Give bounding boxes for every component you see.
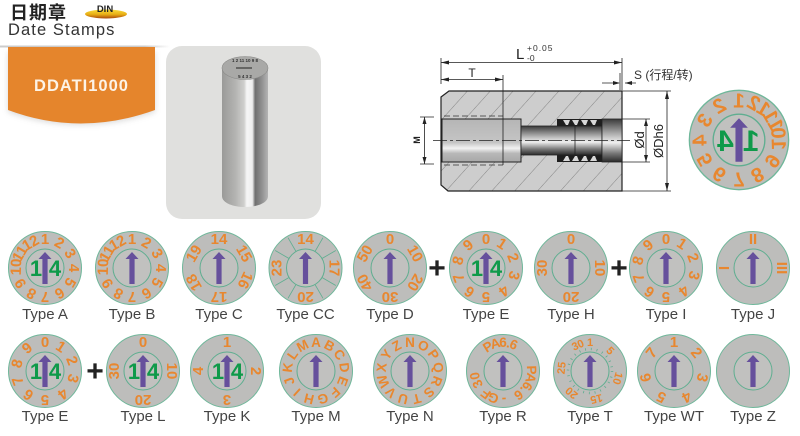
- stamp: Type E (second row): 5: [41, 391, 49, 408]
- stamp: Type H: 0: [567, 231, 575, 248]
- stamp: Type L: 20: [135, 391, 151, 408]
- stamp: Type D: 20: [403, 271, 426, 294]
- stamp: Type C: 18: [183, 271, 206, 294]
- stamp: Type A: 6: [51, 283, 67, 302]
- stamp: Type B: 2: [138, 234, 154, 253]
- stamp: Type A: 5: [60, 274, 79, 290]
- stamp: Type WT: 5: [654, 387, 669, 406]
- stamp: Type M: G: [316, 390, 330, 407]
- stamp: Type B: 5: [147, 274, 166, 290]
- icon: DIN gold badge: [85, 4, 127, 18]
- stamp: Type CC: 23: [268, 260, 286, 276]
- stamp: Type A: 4: [49, 256, 62, 281]
- dimension L: [441, 43, 622, 165]
- stamp: Type A: [8, 231, 82, 323]
- stamp: Type M: M: [294, 337, 311, 355]
- stamp: Type T: 15: [589, 391, 604, 406]
- stamp: Type E (second row): 9: [19, 339, 36, 358]
- stamp: Type M: L: [284, 347, 301, 362]
- plus sign: +: [428, 252, 446, 285]
- stamp: Type D: 30: [382, 288, 398, 305]
- stamp: Type B: 7: [128, 288, 136, 305]
- stamp: Type K: 2: [247, 367, 264, 375]
- stamp: Type N: W: [374, 372, 393, 390]
- stamp: Type K: 4: [190, 366, 207, 375]
- stamp: Type B: 9: [98, 275, 117, 291]
- stamp: Type M: C: [330, 346, 348, 363]
- stamp: Type Z: Type Z: [730, 408, 776, 425]
- dimension S: [602, 67, 693, 90]
- stamp: Type I: Type I: [646, 306, 686, 323]
- stamp: Type I: 2: [683, 251, 702, 265]
- stamp: Type I: 1: [673, 235, 690, 253]
- stamp: Type CC: [268, 231, 342, 323]
- stamp: Type N: T: [410, 390, 423, 407]
- spring cavity: [557, 119, 602, 162]
- stamp: Type E: 7: [450, 271, 469, 285]
- stamp: Type B: 4: [152, 264, 169, 273]
- stamp: Type E: 8: [449, 254, 468, 267]
- stamp: Type E: 3: [504, 269, 523, 282]
- large mirrored stamp face: 7: [733, 168, 745, 190]
- stamp: Type L: 0: [139, 334, 147, 351]
- stamp: Type WT: 7: [643, 344, 661, 362]
- pin head: [602, 119, 622, 162]
- large mirrored stamp face: 6: [709, 161, 730, 186]
- stamp: Type D: 40: [354, 271, 377, 294]
- stamp: Type D: 0: [386, 231, 394, 248]
- stamp: Type E (second row): 0: [41, 334, 49, 351]
- stamp: Type L: 4: [147, 359, 160, 384]
- ejector pin: [521, 126, 602, 155]
- stamp: Type E (second row): 1: [52, 338, 69, 356]
- stamp: Type M: H: [303, 390, 316, 407]
- panel: product photo of stamp pin: [166, 46, 321, 219]
- stamp: Type WT: 4: [678, 387, 694, 406]
- stamp: Type E (second row): 2: [62, 354, 81, 368]
- stamp: Type C: 14: [211, 231, 228, 248]
- stamp: Type R: P: [480, 338, 496, 356]
- stamp: Type A: 7: [41, 288, 49, 305]
- dimension ØDh6: ØDh6: [651, 124, 666, 158]
- stamp: Type N: S: [421, 384, 437, 401]
- icon: DIN gold badge: DIN: [97, 4, 113, 15]
- stamp: Type I: [629, 231, 703, 323]
- stamp: Type E: 6: [461, 282, 478, 301]
- stamp: Type M: K: [280, 362, 296, 373]
- stamp: Type C: 16: [234, 269, 256, 291]
- stamp: Type N: P: [425, 347, 442, 363]
- stamp: Type E (second row): Type E: [22, 408, 68, 425]
- stamp: Type CC: 20: [297, 288, 314, 305]
- stamp: Type N: Q: [430, 361, 446, 374]
- product tag: DDATI1000: [8, 47, 155, 125]
- large mirrored stamp face: [689, 90, 789, 190]
- stamp: Type N: Type N: [386, 408, 434, 425]
- stamp: Type E: 4: [495, 281, 512, 300]
- stamp: Type CC: 14: [297, 231, 314, 248]
- stamp: Type C: Type C: [195, 306, 243, 323]
- plus sign: +: [610, 252, 628, 285]
- stamp: Type D: 10: [403, 242, 426, 265]
- stamp: Type I: 3: [684, 269, 703, 282]
- large mirrored stamp face: 10: [766, 127, 789, 150]
- dimension Ød: [622, 119, 650, 162]
- stamp: Type M: Type M: [291, 408, 341, 425]
- stamp: Type T: 10: [610, 371, 624, 386]
- stamp: Type R: 3: [469, 377, 486, 391]
- body section with hatching: [441, 91, 622, 191]
- stamp: Type K: 3: [223, 391, 231, 408]
- stamp: Type A: Type A: [22, 306, 68, 323]
- stamp: Type N: [374, 334, 446, 425]
- stamp: Type E (second row): [8, 334, 82, 425]
- stamp: Type A: 4: [65, 264, 82, 273]
- stamp: Type R: F: [478, 385, 494, 402]
- stamp: Type E (second row): 1: [30, 359, 42, 384]
- stamp: Type R: [466, 334, 540, 425]
- stamp: Type A: 1: [30, 256, 42, 281]
- stamp: Type I: 4: [675, 281, 692, 300]
- stamp: Type H: Type H: [547, 306, 595, 323]
- title: Chinese heading: 日期章: [10, 2, 67, 23]
- stamp: Type L: Type L: [120, 408, 166, 425]
- stamp: Type T: 1: [587, 337, 593, 349]
- stamp: Type H: 30: [534, 260, 551, 276]
- stamp: Type K: [190, 334, 264, 425]
- stamp: Type J: [716, 231, 790, 323]
- stamp: Type E (second row): 4: [49, 359, 62, 384]
- stamp: Type C: [182, 231, 256, 323]
- product tag: DDATI1000: DDATI1000: [34, 77, 129, 95]
- stamp: Type B: [95, 231, 169, 323]
- stamp: Type H: 10: [591, 260, 608, 276]
- stamp: Type T: [554, 334, 626, 425]
- stamp: Type E (second row): 6: [20, 385, 37, 404]
- stamp: Type K: 1: [212, 359, 224, 384]
- large mirrored stamp face: 5: [693, 149, 718, 170]
- stamp: Type H: 20: [563, 288, 579, 305]
- stamp: Type R: -: [501, 392, 507, 407]
- stamp: Type R: 6: [499, 335, 507, 350]
- stamp: Type N: O: [415, 337, 432, 355]
- panel: product photo of stamp pin: 5 4 3 2: [238, 74, 252, 79]
- large mirrored stamp face: 3: [693, 110, 718, 131]
- stamp: Type M: I: [291, 385, 303, 399]
- stamp: Type R: P: [524, 365, 539, 375]
- stamp: Type E (second row): 3: [63, 372, 82, 385]
- stamp: Type N: R: [428, 374, 445, 389]
- stamp: Type L: 1: [128, 359, 140, 384]
- stamp: Type E: 9: [460, 236, 477, 255]
- stamp: Type M: [280, 334, 352, 425]
- stamp: Type D: Type D: [366, 306, 414, 323]
- stamp: Type N: Y: [378, 347, 395, 363]
- stamp: Type B: 6: [138, 283, 154, 302]
- stamp: Type A: 10: [8, 258, 25, 276]
- stamp: Type B: 10: [95, 258, 112, 276]
- stamp: Type WT: [637, 334, 711, 425]
- stamp: Type I: 7: [630, 271, 649, 285]
- stamp: Type I: 9: [640, 236, 657, 255]
- stamp: Type R: 6: [519, 379, 536, 394]
- large mirrored stamp face: 1: [733, 90, 745, 112]
- stamp: Type A: 11: [9, 243, 32, 265]
- stamp: Type A: 12: [19, 232, 42, 255]
- stamp: Type M: A: [311, 335, 321, 350]
- stamp: Type K: Type K: [204, 408, 250, 425]
- stamp: Type A: 2: [51, 234, 67, 253]
- stamp: Type M: E: [334, 374, 351, 388]
- stamp: Type J: Type J: [731, 306, 775, 323]
- stamp: Type E: 1: [471, 256, 483, 281]
- stamp: Type T: 20: [563, 384, 581, 401]
- stamp: Type E: 0: [482, 231, 490, 248]
- stamp: Type A: 1: [41, 231, 49, 248]
- stamp: Type WT: Type WT: [644, 408, 704, 425]
- plus sign: +: [86, 355, 104, 388]
- stamp: Type WT: 3: [693, 371, 711, 383]
- stamp: Type E: 1: [493, 235, 510, 253]
- dimension Ød: Ød: [632, 131, 647, 149]
- stamp: Type T: 5: [603, 345, 616, 358]
- dimension L: +0.05: [527, 43, 554, 53]
- dimension M: M: [412, 136, 422, 144]
- stamp: Type WT: 2: [687, 344, 705, 362]
- stamp: Type I: 0: [662, 231, 670, 248]
- stamp: Type CC: Type CC: [276, 306, 335, 323]
- stamp: Type R: 6: [511, 387, 526, 404]
- dimension M: [412, 117, 434, 164]
- stamp: Type A: 3: [60, 246, 79, 262]
- stamp: Type M: J: [281, 375, 298, 387]
- stamp: Type B: 8: [111, 284, 126, 303]
- stamp: Type K: 1: [223, 334, 231, 351]
- stamp: Type D: 50: [354, 242, 377, 265]
- dimension L: L: [516, 46, 524, 63]
- large mirrored stamp face: 9: [759, 150, 784, 171]
- stamp: Type T: 25: [556, 361, 569, 375]
- centre line: [433, 140, 630, 142]
- stamp: Type E: 4: [490, 256, 503, 281]
- stamp: Type B: 11: [96, 243, 119, 265]
- stamp: Type A: 9: [11, 275, 30, 291]
- stamp: Type E: [449, 231, 523, 323]
- dimension S: S (行程/转): [634, 67, 693, 82]
- stamp: Type I: 5: [662, 288, 670, 305]
- header rule: [0, 46, 170, 48]
- stamp: Type R: 0: [467, 371, 483, 381]
- large mirrored stamp face: 4: [689, 134, 711, 146]
- dimension L: -0: [527, 53, 535, 63]
- stamp: Type E (second row): 7: [9, 374, 28, 388]
- stamp: Type L: 10: [163, 363, 180, 379]
- stamp: Type C: 15: [232, 242, 255, 265]
- large mirrored stamp face: 12: [743, 91, 774, 122]
- stamp: Type T: Type T: [567, 408, 613, 425]
- stamp: Type R: .: [505, 335, 512, 351]
- stamp: Type N: X: [374, 362, 390, 373]
- dimension ØDh6: [622, 91, 671, 191]
- stamp: Type N: U: [397, 390, 410, 407]
- stamp: Type E: 5: [482, 288, 490, 305]
- stamp: Type E (second row): 8: [8, 357, 27, 370]
- stamp: Type L: 30: [106, 363, 123, 379]
- stamp: Type R: 6: [507, 336, 520, 353]
- subtitle: Date Stamps: Date Stamps: [8, 21, 115, 39]
- stamp: Type I: 6: [641, 282, 658, 301]
- stamp: Type B: Type B: [109, 306, 155, 323]
- stamp: Type L: [106, 334, 180, 425]
- stamp: Type R: Type R: [479, 408, 527, 425]
- stamp: Type B: 1: [128, 231, 136, 248]
- stamp: Type Z: [716, 334, 790, 425]
- stamp: Type WT: 1: [670, 334, 678, 351]
- panel: product photo of stamp pin: 1 2 11 10 9 8: [232, 58, 259, 63]
- stamp: Type B: 12: [106, 232, 129, 255]
- stamp: Type CC: 17: [326, 260, 342, 276]
- stamp: Type E (second row): 4: [54, 384, 71, 403]
- stamp: Type R: G: [486, 389, 501, 407]
- stamp: Type I: 8: [629, 254, 648, 267]
- stamp: Type J: I: [716, 266, 733, 270]
- stamp: Type M: F: [327, 384, 343, 401]
- large mirrored stamp face: 8: [747, 162, 767, 186]
- stamp: Type J: III: [773, 262, 790, 274]
- stamp: Type B: 3: [147, 246, 166, 262]
- technical diagram: cross-section: [412, 43, 693, 191]
- stamp: Type E: 2: [503, 251, 522, 265]
- stamp: Type T: 30: [570, 338, 586, 354]
- threaded bore: [442, 119, 521, 162]
- stamp: Type C: 17: [211, 288, 227, 305]
- large mirrored stamp face: 11: [758, 106, 787, 136]
- stamp: Type C: 19: [183, 242, 206, 265]
- stamp: Type H: [534, 231, 608, 323]
- large mirrored stamp face: 1: [743, 125, 760, 158]
- stamp: Type WT: 6: [637, 371, 655, 383]
- stamp: Type A: 8: [24, 284, 39, 303]
- large mirrored stamp face: 4: [717, 125, 734, 158]
- stamp: Type N: Z: [389, 337, 404, 354]
- dimension T: [441, 66, 503, 82]
- stamp: Type D: [354, 231, 426, 323]
- stamp: Type N: V: [383, 384, 399, 401]
- dimension T: T: [468, 66, 476, 80]
- stamp: Type R: A: [488, 335, 502, 352]
- stamp: Type N: N: [405, 335, 415, 350]
- large mirrored stamp face: 2: [709, 94, 730, 119]
- stamp: Type M: D: [336, 362, 352, 374]
- stamp: Type R: .: [517, 384, 531, 397]
- stamp: Type K: 4: [231, 359, 244, 384]
- stamp: Type J: II: [749, 231, 757, 248]
- stamp: Type R: A: [522, 371, 539, 385]
- stamp: Type E: Type E: [463, 306, 509, 323]
- stamp: Type M: B: [322, 337, 337, 355]
